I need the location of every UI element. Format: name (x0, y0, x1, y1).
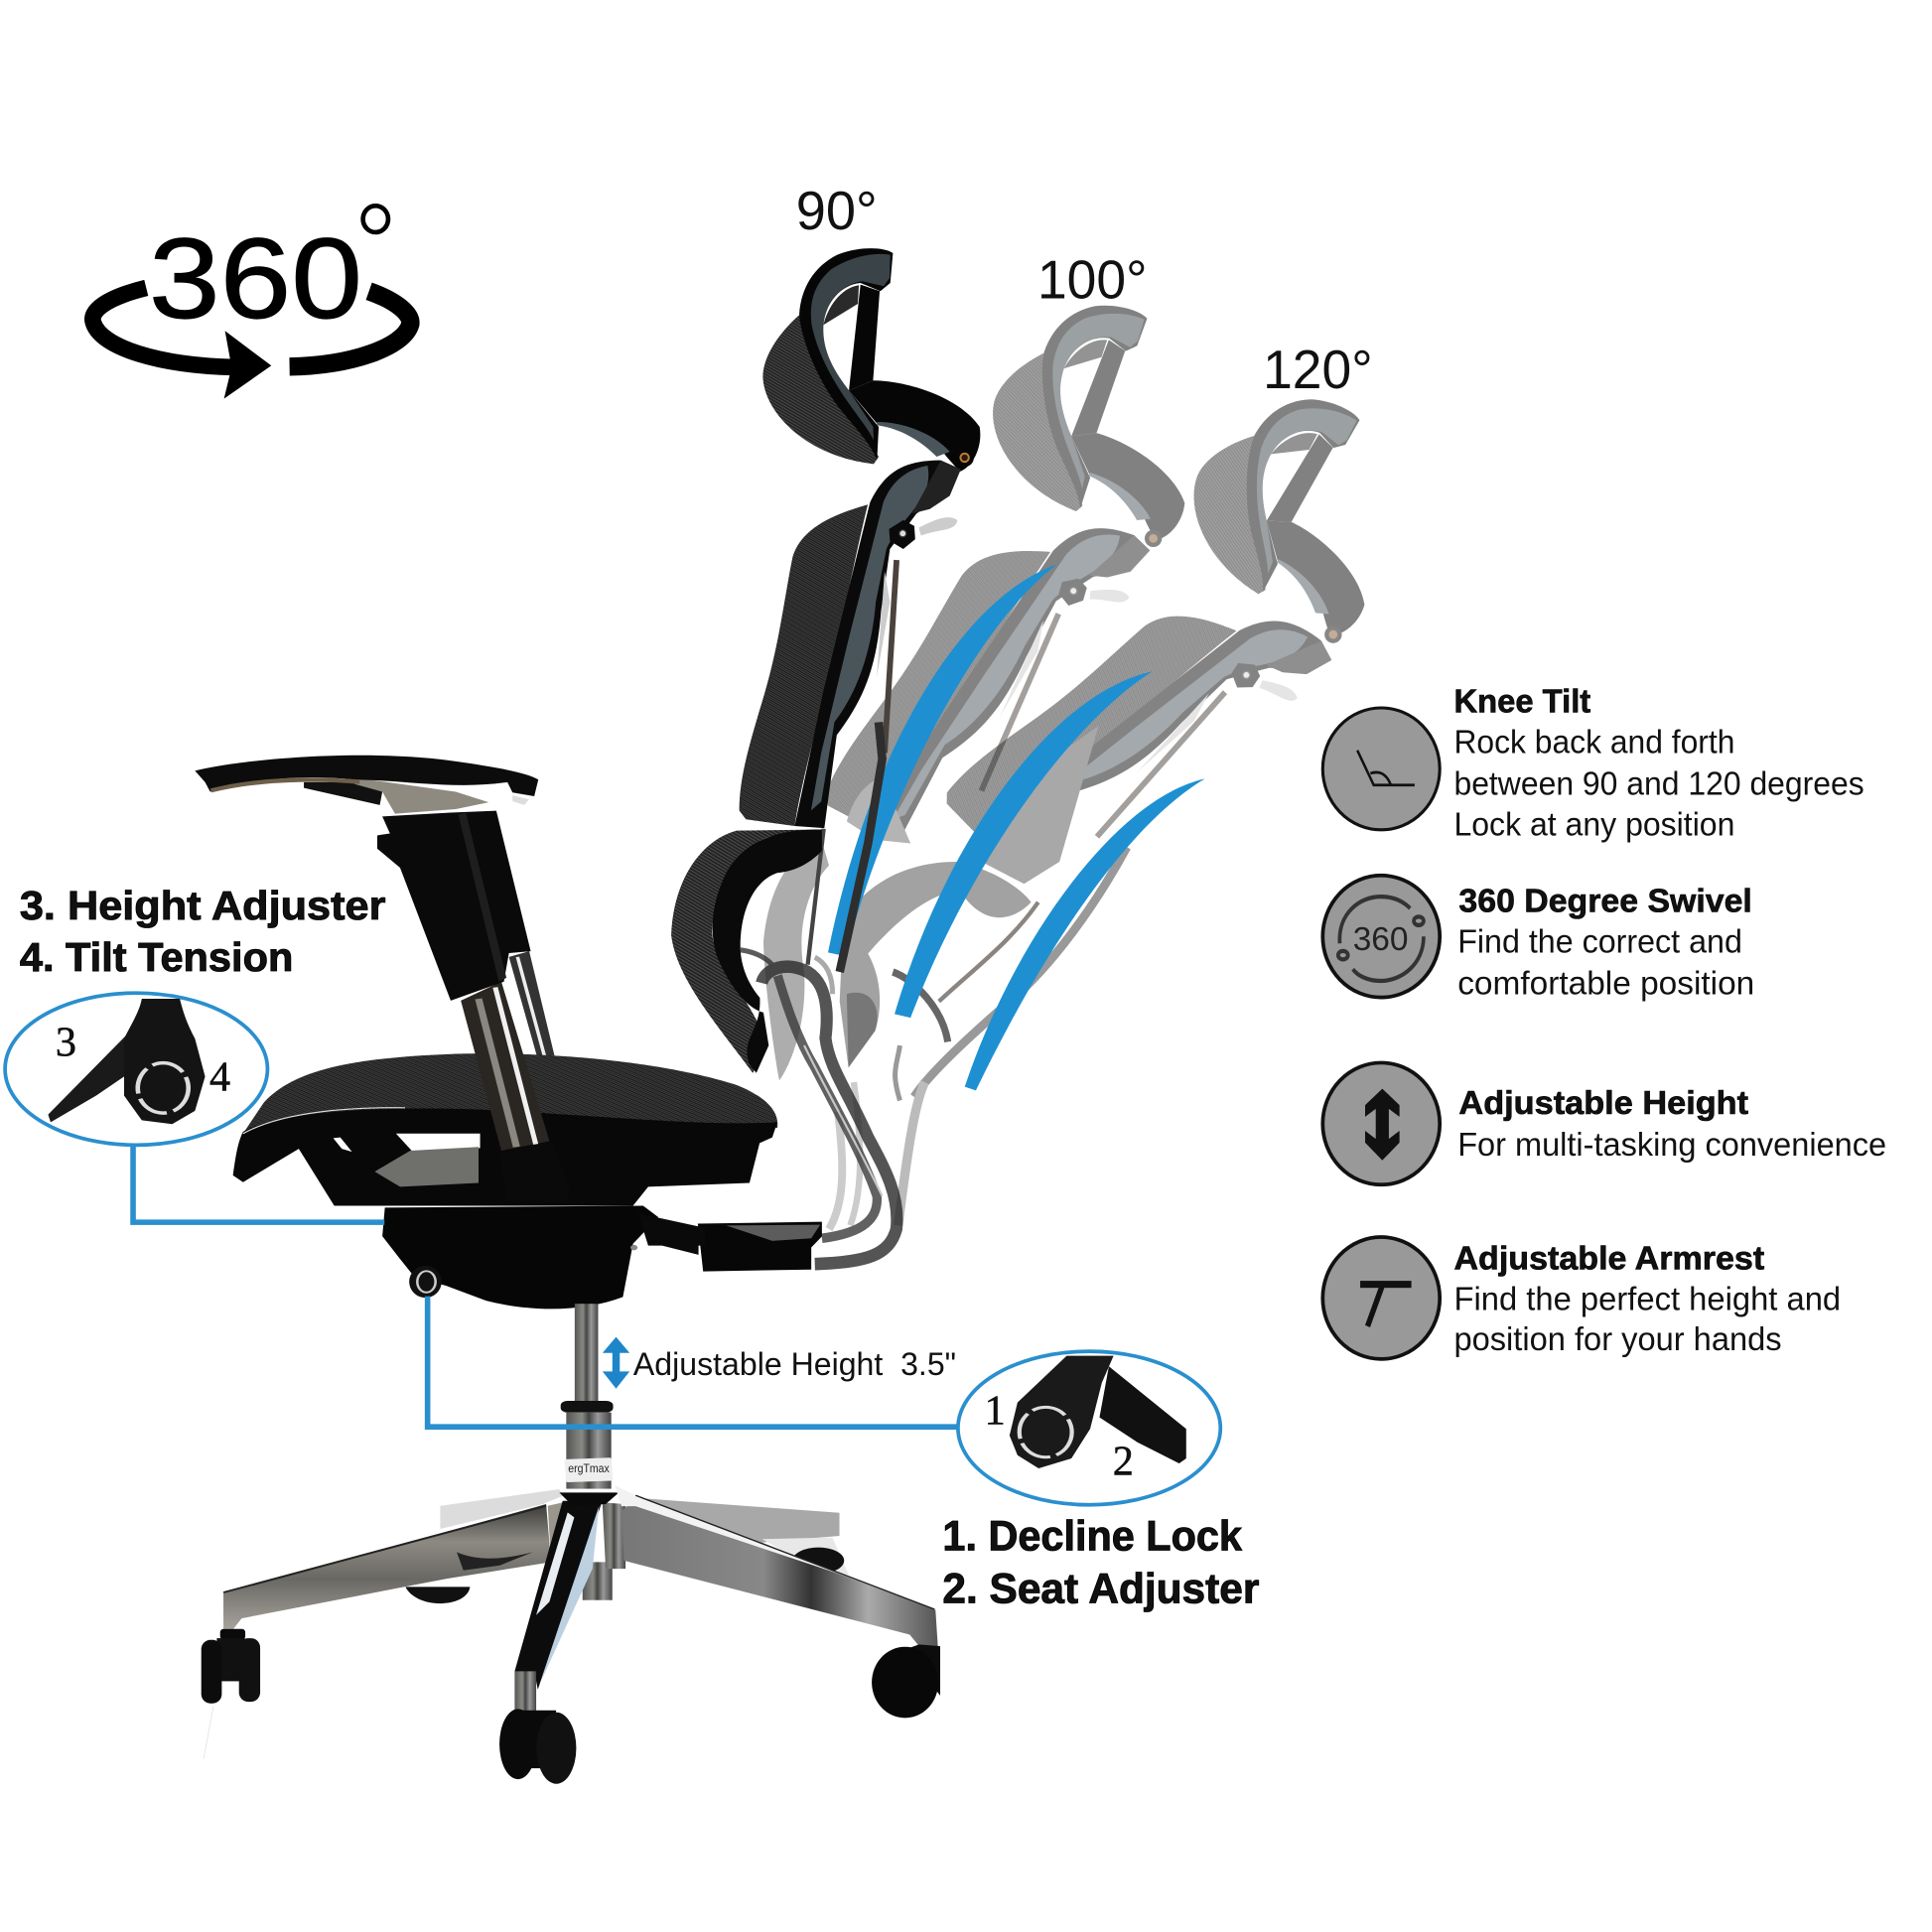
text: knee tilt: Lock at any position (1453, 806, 1734, 843)
icon: 360 swivel: 360 (1353, 921, 1409, 958)
text: 360 degree swivel: Find the correct and (1457, 923, 1742, 960)
right base leg and caster (615, 1485, 940, 1718)
ghost chair: 120 degree position (936, 364, 1437, 943)
blue recline arcs (828, 564, 1205, 1090)
callout: controls 3 and 4: 3 (56, 1020, 76, 1066)
heading: height adjuster and tilt tension: 4. Tilt Tension (20, 934, 293, 980)
text: knee tilt: Rock back and forth (1453, 724, 1734, 760)
icon: adjustable height arrows (1322, 1062, 1440, 1184)
label: adjustable height measure: Adjustable Height 3.5" (633, 1346, 956, 1382)
blue callout line: seat controls (428, 1297, 959, 1427)
icon: 360 rotation: 360 (149, 215, 362, 343)
chair seat, arm and mechanism (195, 756, 777, 1309)
heading: height adjuster and tilt tension (20, 883, 386, 980)
text: 360 degree swivel: 360 Degree Swivel (1458, 883, 1752, 919)
label: 100 degrees: 100° (1037, 249, 1147, 310)
heading: height adjuster and tilt tension: 3. Height Adjuster (20, 883, 386, 928)
text: 360 degree swivel (1457, 883, 1754, 1003)
main chair backrest (740, 461, 961, 828)
icon: 360 swivel (1322, 876, 1440, 998)
callout: controls 1 and 2 (958, 1351, 1220, 1505)
gas lift column: ergTmax (568, 1462, 610, 1475)
gas lift column (561, 1304, 614, 1489)
callout: controls 1 and 2: 1 (985, 1388, 1006, 1435)
blue callout line: tilt controls (133, 1146, 384, 1222)
text: adjustable height (1457, 1085, 1886, 1164)
swivel base (202, 1489, 625, 1784)
heading: decline lock and seat adjuster: 2. Seat Adjuster (942, 1566, 1259, 1612)
icon: knee tilt (1322, 708, 1440, 830)
text: 360 degree swivel: comfortable position (1457, 966, 1754, 1003)
text: adjustable armrest (1453, 1240, 1841, 1358)
text: adjustable armrest: position for your hands (1453, 1321, 1782, 1358)
icon: adjustable armrest (1322, 1237, 1440, 1359)
ghost chair: 100 degree position (819, 281, 1230, 888)
text: adjustable height: For multi-tasking convenience (1457, 1127, 1886, 1164)
heading: decline lock and seat adjuster: 1. Decline Lock (942, 1512, 1243, 1559)
text: adjustable armrest: Find the perfect height and (1453, 1281, 1841, 1317)
text: adjustable height: Adjustable Height (1458, 1085, 1748, 1122)
callout: controls 3 and 4 (5, 993, 267, 1145)
main chair lumbar support and tubes (655, 722, 897, 1272)
main chair headrest (762, 248, 980, 472)
ghost lumbar supports and tubes (763, 726, 1127, 1229)
text: knee tilt: Knee Tilt (1453, 683, 1590, 720)
text: knee tilt (1453, 683, 1864, 843)
callout: controls 1 and 2: 2 (1113, 1439, 1134, 1485)
text: adjustable armrest: Adjustable Armrest (1453, 1240, 1764, 1277)
label: 120 degrees: 120° (1263, 340, 1373, 400)
text: knee tilt: between 90 and 120 degrees (1453, 765, 1864, 802)
label: 90 degrees: 90° (796, 181, 878, 241)
blue height arrow (603, 1337, 629, 1389)
callout: controls 3 and 4: 4 (209, 1053, 230, 1100)
heading: decline lock and seat adjuster (942, 1512, 1259, 1612)
icon: 360 rotation (92, 206, 410, 399)
